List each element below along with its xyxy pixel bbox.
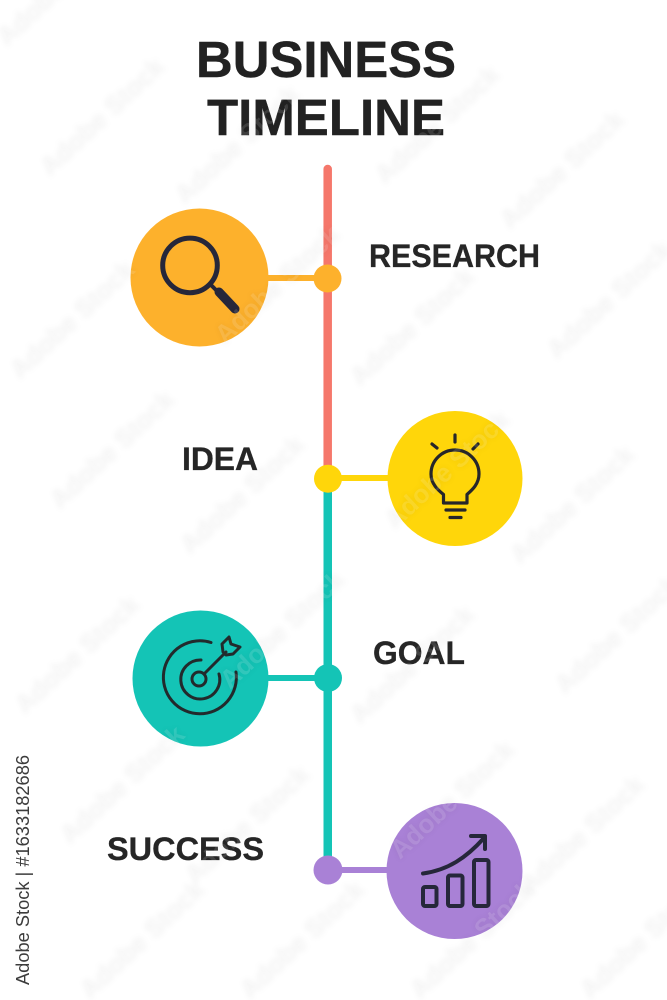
watermark lettering: Adobe Stock bbox=[384, 734, 521, 864]
watermark halo: Adobe Stock bbox=[504, 439, 641, 569]
circle: research bbox=[130, 208, 268, 346]
watermark halo: Adobe Stock bbox=[494, 104, 631, 234]
node: idea bbox=[314, 465, 342, 493]
watermark lettering: Adobe Stock bbox=[209, 219, 346, 349]
watermark lettering: Adobe Stock bbox=[494, 104, 631, 234]
watermark halo: Adobe Stock bbox=[54, 719, 191, 849]
watermark lettering: Adobe Stock bbox=[504, 439, 641, 569]
label: research: RESEARCH bbox=[369, 238, 540, 274]
watermark lettering: Adobe Stock bbox=[9, 589, 146, 719]
title: TIMELINE bbox=[207, 89, 445, 146]
icon: light bulb bbox=[431, 435, 479, 518]
watermark halo: Adobe Stock bbox=[174, 429, 311, 559]
watermark halo: Adobe Stock bbox=[344, 261, 481, 391]
watermark lettering: Adobe Stock bbox=[44, 384, 181, 514]
watermark halo: Adobe Stock bbox=[214, 564, 351, 694]
icon: target with arrow bbox=[163, 637, 240, 714]
node: research bbox=[314, 264, 342, 292]
connector: idea bbox=[335, 475, 397, 481]
connector: goal bbox=[262, 675, 322, 681]
circle: success bbox=[386, 803, 522, 939]
connector: research bbox=[262, 275, 322, 281]
watermark lettering: Adobe Stock bbox=[4, 254, 141, 384]
watermark halo: Adobe Stock bbox=[344, 599, 481, 729]
watermark halo: Adobe Stock bbox=[209, 219, 346, 349]
watermark lettering: Adobe Stock bbox=[34, 51, 171, 181]
node: goal bbox=[314, 664, 342, 692]
watermark lettering: Adobe Stock bbox=[214, 564, 351, 694]
watermark halo: Adobe Stock bbox=[169, 79, 306, 209]
watermark halo: Adobe Stock bbox=[44, 384, 181, 514]
watermark halo: Adobe Stock bbox=[4, 254, 141, 384]
watermark lettering: Adobe Stock bbox=[369, 59, 506, 189]
circle: goal bbox=[132, 610, 268, 746]
step: success bbox=[107, 803, 522, 939]
connector: success bbox=[335, 867, 397, 873]
step: idea bbox=[182, 411, 522, 546]
node: success bbox=[314, 856, 342, 884]
label: goal: GOAL bbox=[373, 635, 465, 671]
watermark lettering: Adobe Stock bbox=[174, 429, 311, 559]
watermark halo: Adobe Stock bbox=[9, 589, 146, 719]
watermark halo: Adobe Stock bbox=[514, 769, 651, 899]
step: research bbox=[130, 208, 540, 346]
icon: rising bar chart bbox=[423, 836, 488, 906]
watermark lettering: Adobe Stock bbox=[379, 404, 516, 534]
watermark lettering: Adobe Stock bbox=[179, 759, 316, 889]
watermark halo: Adobe Stock bbox=[369, 59, 506, 189]
label: idea: IDEA bbox=[182, 441, 258, 477]
watermark lettering: Adobe Stock bbox=[169, 79, 306, 209]
title: BUSINESS bbox=[196, 31, 456, 88]
watermark lettering: Adobe Stock bbox=[344, 599, 481, 729]
step: goal bbox=[132, 610, 465, 746]
title bbox=[196, 31, 456, 146]
label: success: SUCCESS bbox=[107, 831, 264, 867]
watermark halo: Adobe Stock bbox=[384, 734, 521, 864]
watermark lettering: Adobe Stock bbox=[54, 719, 191, 849]
icon: magnifying glass bbox=[163, 238, 235, 309]
timeline spine bbox=[324, 169, 332, 865]
watermark halo: Adobe Stock bbox=[379, 404, 516, 534]
stock id text: Adobe Stock | #1633182686 bbox=[12, 755, 33, 985]
watermark halo: Adobe Stock bbox=[179, 759, 316, 889]
watermark lettering: Adobe Stock bbox=[514, 769, 651, 899]
watermark lettering: Adobe Stock bbox=[344, 261, 481, 391]
circle: idea bbox=[388, 411, 522, 546]
watermark halo: Adobe Stock bbox=[34, 51, 171, 181]
